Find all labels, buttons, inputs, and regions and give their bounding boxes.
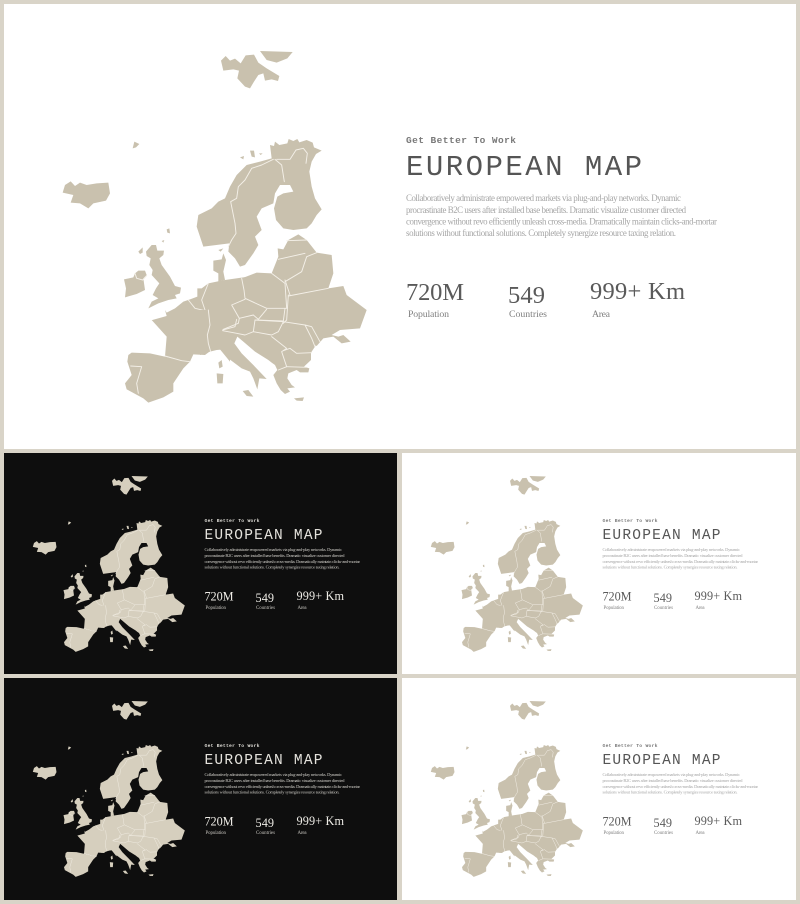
content scaled — [33, 701, 361, 877]
stat: area — [590, 278, 685, 320]
kicker text: Get Better To Work — [204, 743, 260, 749]
stat: countries: Countries — [256, 831, 275, 836]
body paragraph: solutions without functional solutions. Completely synergize resource taxing relation. — [602, 790, 738, 794]
map of Europe — [33, 476, 185, 652]
body paragraph: Collaboratively administrate empowered markets via plug-and-play networks. Dynamic — [602, 772, 740, 777]
title: EUROPEAN MAP — [602, 753, 720, 769]
panel: dark slide top left — [4, 453, 397, 674]
body paragraph: Collaboratively administrate empowered markets via plug-and-play networks. Dynamic — [204, 547, 342, 552]
stat: countries: 549 — [654, 591, 672, 605]
stat: population: Population — [604, 831, 625, 836]
body paragraph: solutions without functional solutions. Completely synergize resource taxing relation. — [406, 228, 676, 238]
stat: population — [204, 590, 234, 611]
body paragraph: procrastinate B2C users after installed base benefits. Dramatic visualize customer directed — [602, 553, 743, 558]
stat: population — [602, 590, 632, 611]
stat: countries — [654, 816, 673, 836]
stat: area: Area — [696, 606, 705, 611]
body paragraph: procrastinate B2C users after installed base benefits. Dramatic visualize customer directed — [406, 205, 687, 215]
stat: area — [296, 589, 344, 611]
stat: area: 999+ Km — [694, 589, 742, 603]
map of Europe — [33, 701, 185, 877]
body paragraph: convergence without revo efficiently unleash cross-media. Dramatically maintain clicks-and-mortar — [204, 784, 361, 789]
stat: countries — [256, 591, 275, 611]
stat: population — [204, 814, 234, 836]
stat: countries: 549 — [654, 816, 672, 830]
slide surface — [402, 453, 796, 674]
stat: population: Population — [206, 606, 227, 611]
stat: area: Area — [298, 606, 307, 611]
stat: population: Population — [206, 831, 227, 836]
stat: countries: Countries — [654, 606, 673, 611]
stat: area — [694, 814, 742, 836]
map of Europe — [431, 476, 583, 652]
title: EUROPEAN MAP — [406, 151, 642, 184]
stat: area — [694, 589, 742, 611]
body paragraph: convergence without revo efficiently unleash cross-media. Dramatically maintain clicks-and-mortar — [602, 559, 759, 564]
stat: population: 720M — [406, 279, 464, 306]
kicker text: Get Better To Work — [204, 518, 260, 524]
stat: population: 720M — [602, 814, 632, 828]
stat: area: 999+ Km — [296, 814, 344, 828]
kicker text: Get Better To Work — [602, 518, 658, 524]
kicker text: Get Better To Work — [406, 135, 516, 146]
body paragraph: Collaboratively administrate empowered markets via plug-and-play networks. Dynamic — [406, 193, 681, 203]
panel: dark slide bottom left — [4, 678, 397, 900]
stat: population: 720M — [204, 814, 234, 828]
stat: population: 720M — [204, 590, 234, 604]
stat: countries: Countries — [654, 831, 673, 836]
content scaled — [33, 476, 361, 652]
body paragraph: solutions without functional solutions. Completely synergize resource taxing relation. — [204, 564, 340, 570]
content scaled — [431, 701, 759, 877]
stat: area: Area — [696, 831, 705, 836]
stat: population — [602, 814, 632, 836]
stat: population: Population — [604, 606, 625, 611]
stat: area: Area — [298, 831, 307, 836]
panel: light slide bottom right — [402, 678, 796, 900]
stat: countries: 549 — [508, 282, 545, 309]
body paragraph: procrastinate B2C users after installed base benefits. Dramatic visualize customer directed — [204, 778, 345, 783]
stat: countries: 549 — [256, 816, 274, 830]
body paragraph: solutions without functional solutions. Completely synergize resource taxing relation. — [602, 564, 738, 570]
map of Europe — [431, 701, 583, 877]
body paragraph: solutions without functional solutions. Completely synergize resource taxing relation. — [204, 790, 340, 794]
stat: countries: 549 — [256, 591, 274, 605]
stat: countries: Countries — [509, 309, 547, 320]
stat: area: 999+ Km — [694, 814, 742, 828]
stat: area: 999+ Km — [296, 589, 344, 603]
body paragraph: procrastinate B2C users after installed base benefits. Dramatic visualize customer directed — [204, 553, 345, 558]
body paragraph: procrastinate B2C users after installed base benefits. Dramatic visualize customer directed — [602, 778, 743, 783]
title: EUROPEAN MAP — [204, 528, 322, 544]
slide surface — [4, 678, 397, 900]
slide surface — [402, 678, 796, 900]
kicker text: Get Better To Work — [602, 743, 658, 749]
title: EUROPEAN MAP — [204, 753, 322, 769]
title: EUROPEAN MAP — [602, 528, 720, 544]
body paragraph: convergence without revo efficiently unleash cross-media. Dramatically maintain clicks-and-mortar — [602, 784, 759, 789]
stat: area — [296, 814, 344, 836]
stat: population — [406, 279, 464, 320]
body paragraph: Collaboratively administrate empowered markets via plug-and-play networks. Dynamic — [204, 772, 342, 777]
body paragraph: Collaboratively administrate empowered markets via plug-and-play networks. Dynamic — [602, 547, 740, 552]
content scaled — [431, 476, 759, 652]
stat: countries: Countries — [256, 606, 275, 611]
body paragraph: convergence without revo efficiently unleash cross-media. Dramatically maintain clicks-and-mortar — [204, 559, 361, 564]
panel: main light slide — [4, 4, 796, 449]
stat: area: Area — [592, 309, 611, 320]
stat: population: Population — [408, 309, 449, 320]
stat: area: 999+ Km — [590, 278, 685, 305]
map of Europe — [63, 51, 367, 403]
body paragraph: convergence without revo efficiently unleash cross-media. Dramatically maintain clicks-and-mortar — [406, 216, 717, 226]
stat: countries — [256, 816, 275, 836]
stat: countries — [508, 282, 547, 320]
stat: countries — [654, 591, 673, 611]
slide surface — [4, 453, 397, 674]
panel: light slide top right — [402, 453, 796, 674]
slide surface — [4, 4, 796, 449]
stat: population: 720M — [602, 590, 632, 604]
